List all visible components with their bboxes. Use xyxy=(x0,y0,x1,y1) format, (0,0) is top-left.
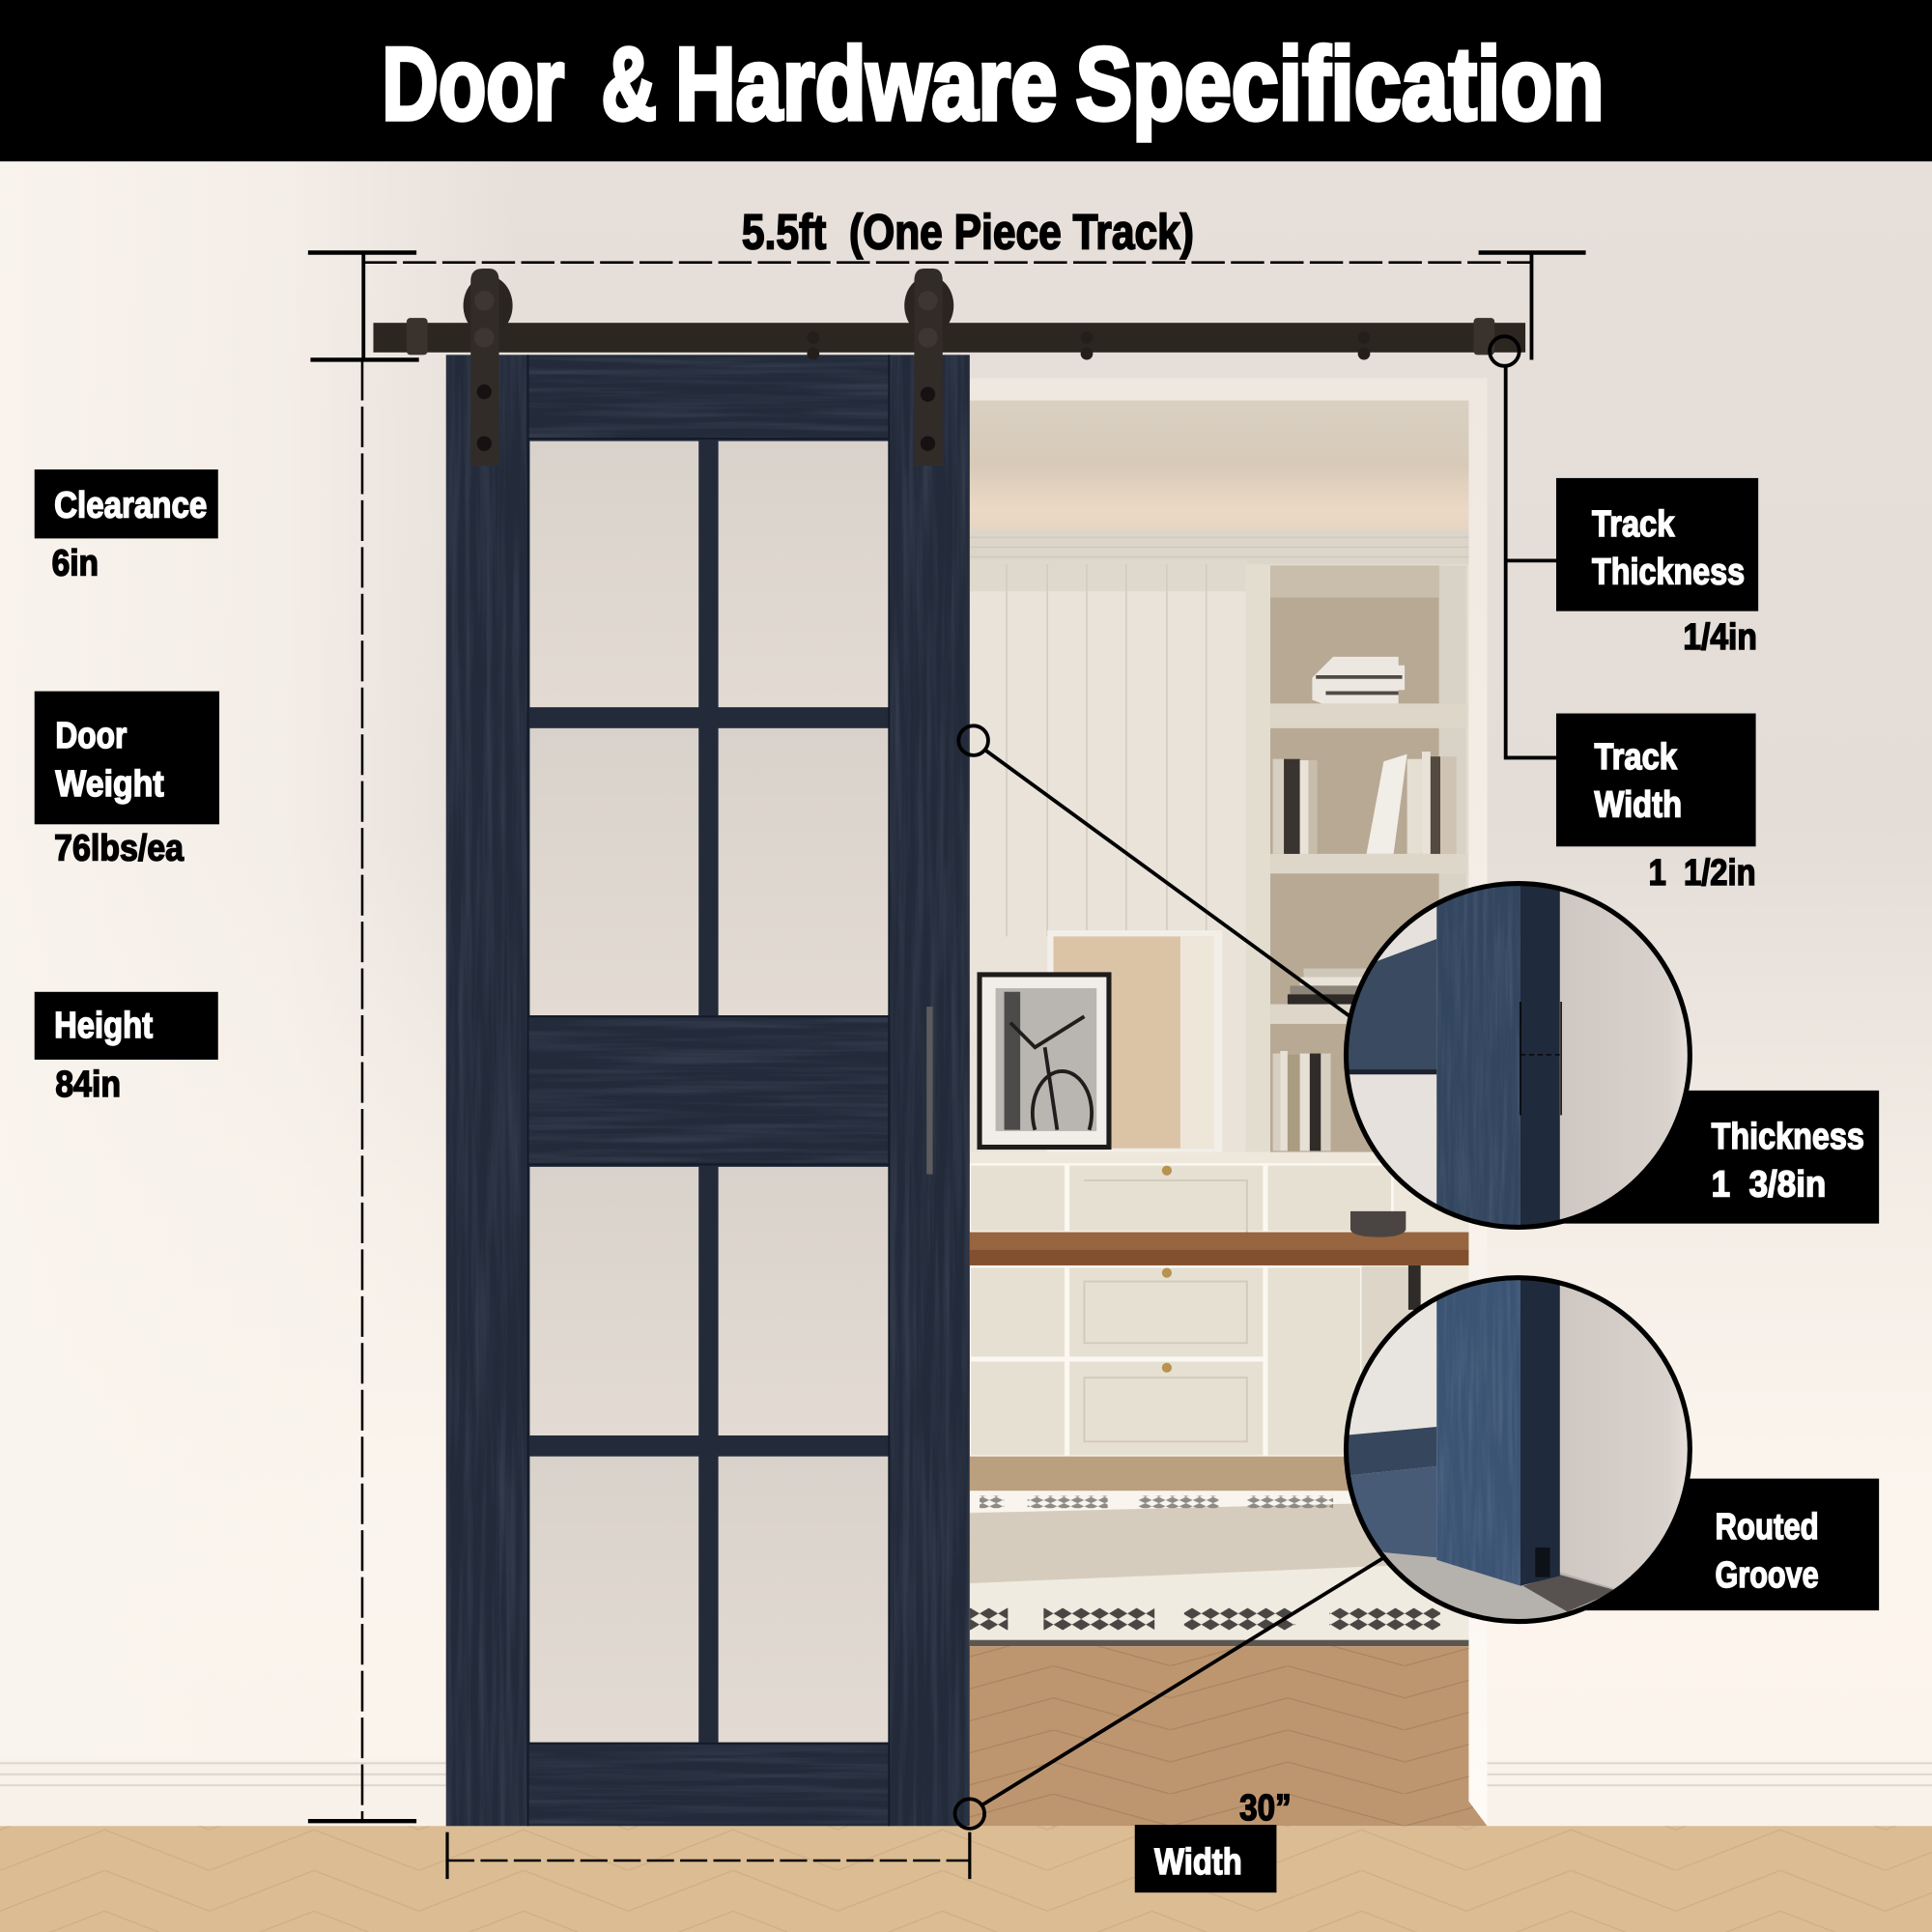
callout: door thickness xyxy=(958,725,1351,1018)
label: thickness xyxy=(1561,1091,1879,1224)
glass panes xyxy=(529,441,889,1743)
books bottom shelf xyxy=(1273,1051,1331,1151)
width dimension xyxy=(447,1833,970,1879)
stacked books top shelf xyxy=(1312,657,1405,703)
title: & xyxy=(601,26,657,142)
ceiling xyxy=(970,401,1468,529)
label: track width: Width xyxy=(1595,784,1682,826)
label: track thickness xyxy=(1556,478,1758,658)
crown moulding xyxy=(970,529,1468,564)
end stops xyxy=(407,318,428,355)
callout: track dimensions xyxy=(1490,336,1556,757)
label: thickness: Thickness xyxy=(1712,1116,1864,1157)
callout: routed groove xyxy=(955,1556,1386,1829)
label: track width: Track xyxy=(1595,736,1678,778)
framed bicycle photo xyxy=(977,972,1112,1150)
doorway frame xyxy=(970,379,1488,1826)
label: height xyxy=(35,992,218,1105)
label: routed groove xyxy=(1583,1479,1879,1610)
track bar xyxy=(373,323,1525,353)
label: width xyxy=(1135,1787,1292,1892)
baseboard xyxy=(0,1759,1932,1826)
cabinets xyxy=(970,1152,1468,1460)
label: track thickness: Thickness xyxy=(1592,552,1745,593)
bookshelf xyxy=(1246,564,1468,1157)
label: clearance: Clearance xyxy=(54,485,207,526)
label: width: 30” xyxy=(1239,1787,1292,1829)
track bolts xyxy=(475,331,1370,359)
label: height: Height xyxy=(54,1005,153,1046)
door rail seams xyxy=(528,355,890,1826)
detail circle: routed groove xyxy=(1343,1275,1695,1627)
wood grain rails xyxy=(528,357,890,1824)
label: thickness: 1 3/8in xyxy=(1712,1164,1826,1206)
label: door weight: Weight xyxy=(55,763,164,805)
desk and bowl xyxy=(970,1211,1468,1310)
label: track thickness: Track xyxy=(1592,503,1675,545)
label: track thickness: 1/4in xyxy=(1683,616,1757,658)
books middle shelf xyxy=(1273,752,1457,854)
label: clearance: 6in xyxy=(52,543,99,584)
label: clearance xyxy=(35,469,218,584)
doorway with room view xyxy=(970,379,1488,1826)
height dimension xyxy=(308,359,416,1821)
label: width: Width xyxy=(1154,1841,1242,1883)
wood grain stiles xyxy=(446,355,970,1826)
stacked books lower shelf xyxy=(1288,969,1368,1005)
label: track width xyxy=(1556,714,1756,894)
hanger left xyxy=(464,269,513,466)
label: door weight xyxy=(35,692,219,868)
title xyxy=(382,26,1605,142)
floor xyxy=(0,1826,1932,1932)
hanger right xyxy=(904,269,953,466)
label: door weight: 76lbs/ea xyxy=(54,827,185,868)
title: Hardware xyxy=(675,26,1057,142)
title: Door xyxy=(382,26,564,142)
label: routed groove: Groove xyxy=(1716,1554,1819,1596)
panelled wall xyxy=(970,560,1247,1164)
label: door weight: Door xyxy=(55,715,127,756)
door slab xyxy=(446,355,970,1826)
title bar xyxy=(0,0,1932,161)
leader lines and callout circles xyxy=(955,336,1556,1829)
label: track width: 1 1/2in xyxy=(1649,852,1756,894)
beige art print xyxy=(1047,930,1222,1152)
label: height: 84in xyxy=(55,1064,121,1105)
track length label: 5.5ft (One Piece Track) xyxy=(742,205,1194,260)
label: routed groove: Routed xyxy=(1716,1506,1819,1548)
room wood floor xyxy=(970,1646,1488,1826)
detail circle: door thickness xyxy=(1343,881,1695,1233)
door handle xyxy=(926,1007,933,1175)
sliding door xyxy=(446,355,970,1826)
rug xyxy=(970,1491,1468,1646)
track length dimension xyxy=(308,252,1586,359)
track rail hardware xyxy=(373,269,1525,466)
room floor strip xyxy=(970,1457,1468,1491)
title: Specification xyxy=(1076,26,1605,142)
